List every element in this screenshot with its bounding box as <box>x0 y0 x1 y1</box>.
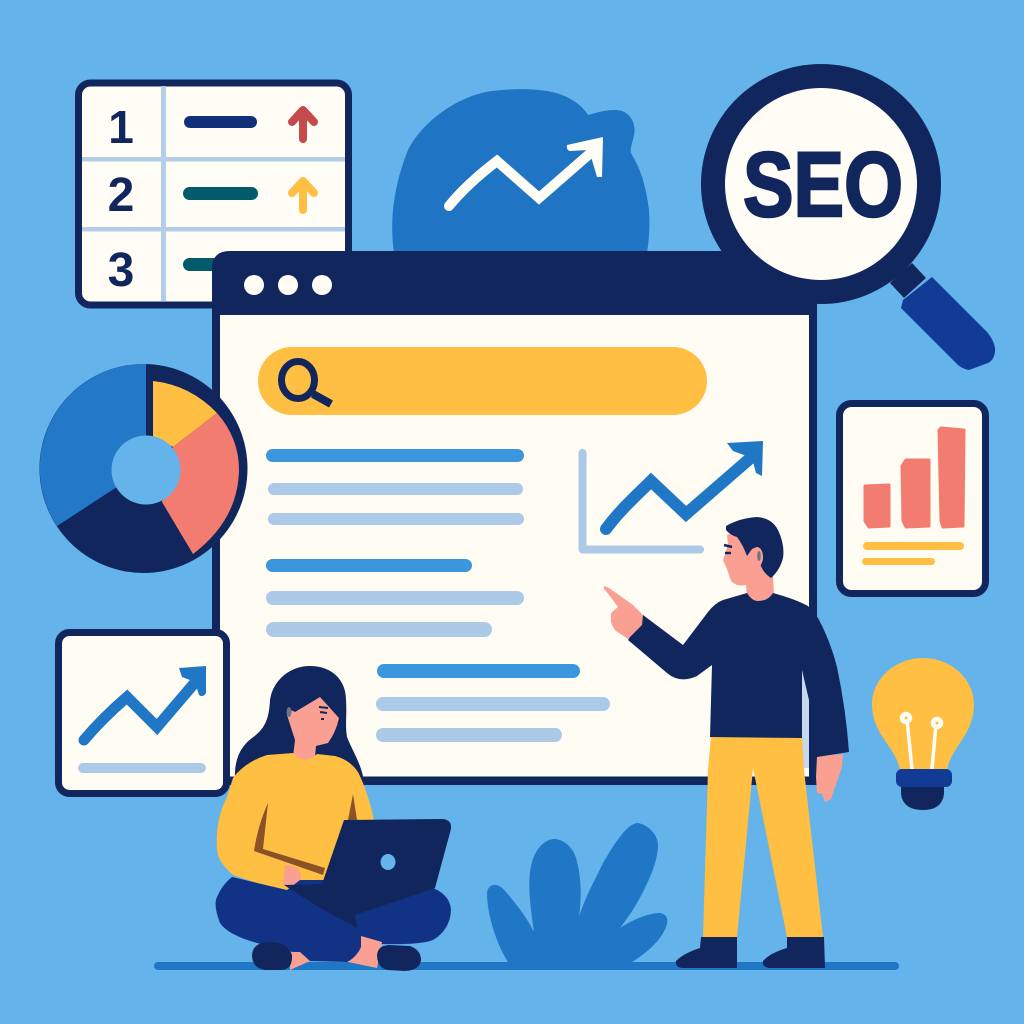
man head and neck <box>723 530 774 602</box>
donut hole <box>112 436 180 504</box>
panel: browser window <box>212 251 817 785</box>
woman hair <box>235 666 364 790</box>
laptop logo <box>380 854 396 870</box>
window control dots <box>244 275 332 295</box>
woman hand <box>283 865 301 886</box>
donut chart <box>40 364 248 573</box>
caption lines <box>862 542 964 565</box>
man eye <box>724 545 732 553</box>
text block 1 <box>266 449 524 525</box>
woman ear shadow <box>286 707 292 717</box>
figure: woman with laptop <box>216 666 451 971</box>
row bar 2 <box>183 187 258 200</box>
donut segment: yellow <box>153 381 217 447</box>
line chart with axes <box>582 441 763 550</box>
search bar <box>258 347 707 415</box>
caption bar <box>78 763 206 773</box>
woman sweater <box>217 753 378 892</box>
woman eye details <box>319 707 328 719</box>
rank number 3: 3 <box>108 244 134 297</box>
man left boot <box>676 937 737 968</box>
man sweater <box>628 593 849 757</box>
SEO label: SEO <box>743 134 903 236</box>
panel: blue blob with growth arrow <box>392 89 649 253</box>
magnifier handle <box>901 277 995 370</box>
text block 2 <box>266 559 524 637</box>
bars <box>865 428 964 527</box>
woman face and neck <box>287 697 339 766</box>
icon: plant <box>487 823 667 962</box>
woman bare feet <box>290 936 382 970</box>
man pointing hand <box>604 586 643 639</box>
bulb collar <box>896 769 952 787</box>
woman trousers <box>216 877 451 962</box>
man right hand <box>816 754 843 802</box>
bulb bottom cap <box>901 785 944 810</box>
row bar 3 <box>183 258 258 271</box>
man right boot <box>763 937 825 968</box>
icon: light bulb <box>872 658 974 810</box>
woman right shoe <box>377 945 421 971</box>
trend arrow <box>84 666 206 740</box>
man trousers <box>703 736 823 937</box>
row bar 1 <box>184 116 257 128</box>
rank number 1: 1 <box>108 101 134 153</box>
icon: SEO magnifying glass <box>701 64 995 370</box>
sweater fold shadows <box>254 794 357 875</box>
man ear <box>751 547 763 567</box>
light strip behind arm <box>801 670 809 768</box>
icon: red up arrow <box>292 110 314 139</box>
panel: bar chart card <box>840 404 986 594</box>
text block 3 <box>376 664 610 742</box>
laptop <box>284 819 451 928</box>
panel: ranking table <box>78 83 348 305</box>
panel: trend chart card <box>58 632 226 794</box>
icon: white trend arrow <box>449 137 603 206</box>
figure: man pointing <box>604 517 849 968</box>
ground line <box>154 962 899 970</box>
rank number 2: 2 <box>108 169 134 222</box>
donut segment: blue <box>40 364 146 526</box>
woman left shoe <box>252 942 292 970</box>
bulb filaments <box>901 713 942 769</box>
icon: yellow up arrow <box>292 181 314 210</box>
donut segment: salmon <box>162 413 239 554</box>
icon: search magnifier <box>282 362 331 404</box>
man hair <box>726 517 783 578</box>
